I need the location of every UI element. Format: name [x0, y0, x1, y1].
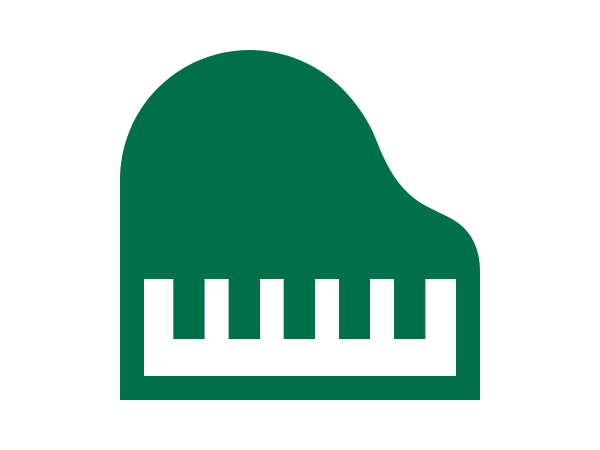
keyboard [144, 279, 456, 376]
piano body [120, 50, 480, 400]
